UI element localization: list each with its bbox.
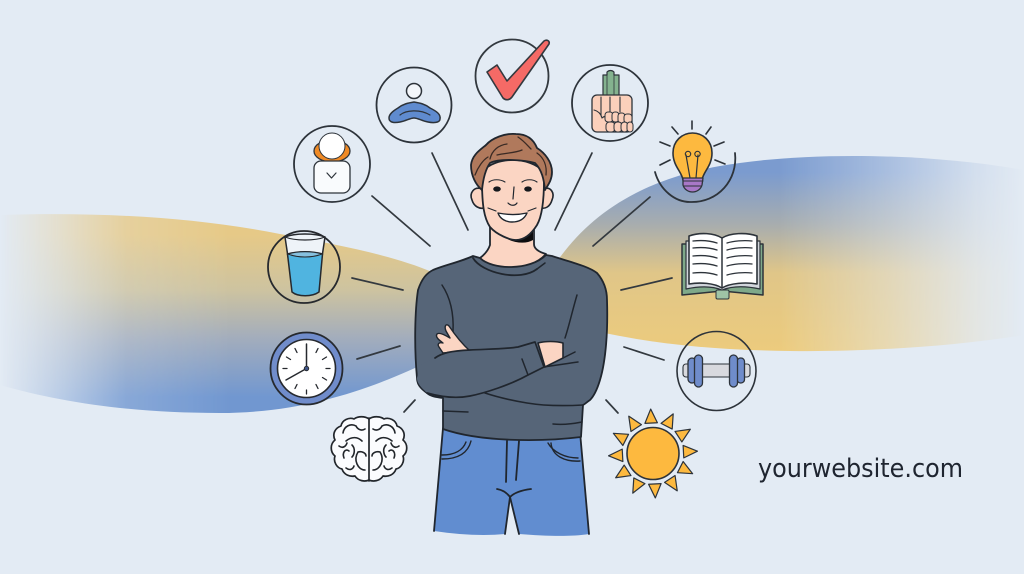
- icon: fist with green fingers: [572, 65, 648, 141]
- eyes and brows: [489, 180, 537, 192]
- smile: [498, 213, 527, 222]
- cheek lines: [488, 208, 536, 211]
- icon: glass of water: [268, 231, 340, 303]
- icon: clock: [270, 332, 342, 404]
- jeans outlines: [434, 428, 589, 534]
- face: [482, 160, 544, 240]
- website text: yourwebsite.com: [758, 454, 963, 484]
- icon: checkmark: [476, 40, 549, 112]
- nose: [508, 187, 517, 205]
- icon: brain: [331, 417, 407, 481]
- left hand: [436, 325, 470, 353]
- right wave band: [558, 156, 1024, 351]
- sweater details: [442, 258, 583, 424]
- front forearm: [417, 342, 544, 397]
- icon: sun: [608, 409, 698, 498]
- hair: [471, 134, 552, 190]
- right hand: [538, 342, 563, 367]
- icon: person card: [294, 126, 370, 202]
- connector lines: [352, 153, 672, 413]
- icon: meditating person: [376, 68, 452, 142]
- hair strands: [475, 137, 546, 175]
- icon: open book: [682, 234, 763, 299]
- person: [415, 134, 607, 536]
- ears: [471, 188, 553, 208]
- neck shadow: [500, 230, 533, 243]
- forearm outlines: [427, 342, 578, 397]
- left wave band: [0, 214, 432, 413]
- icon: dumbbell: [677, 332, 756, 410]
- sweater: [415, 255, 607, 440]
- neck: [480, 225, 546, 268]
- jeans: [434, 425, 589, 536]
- icon: lightbulb: [655, 121, 735, 202]
